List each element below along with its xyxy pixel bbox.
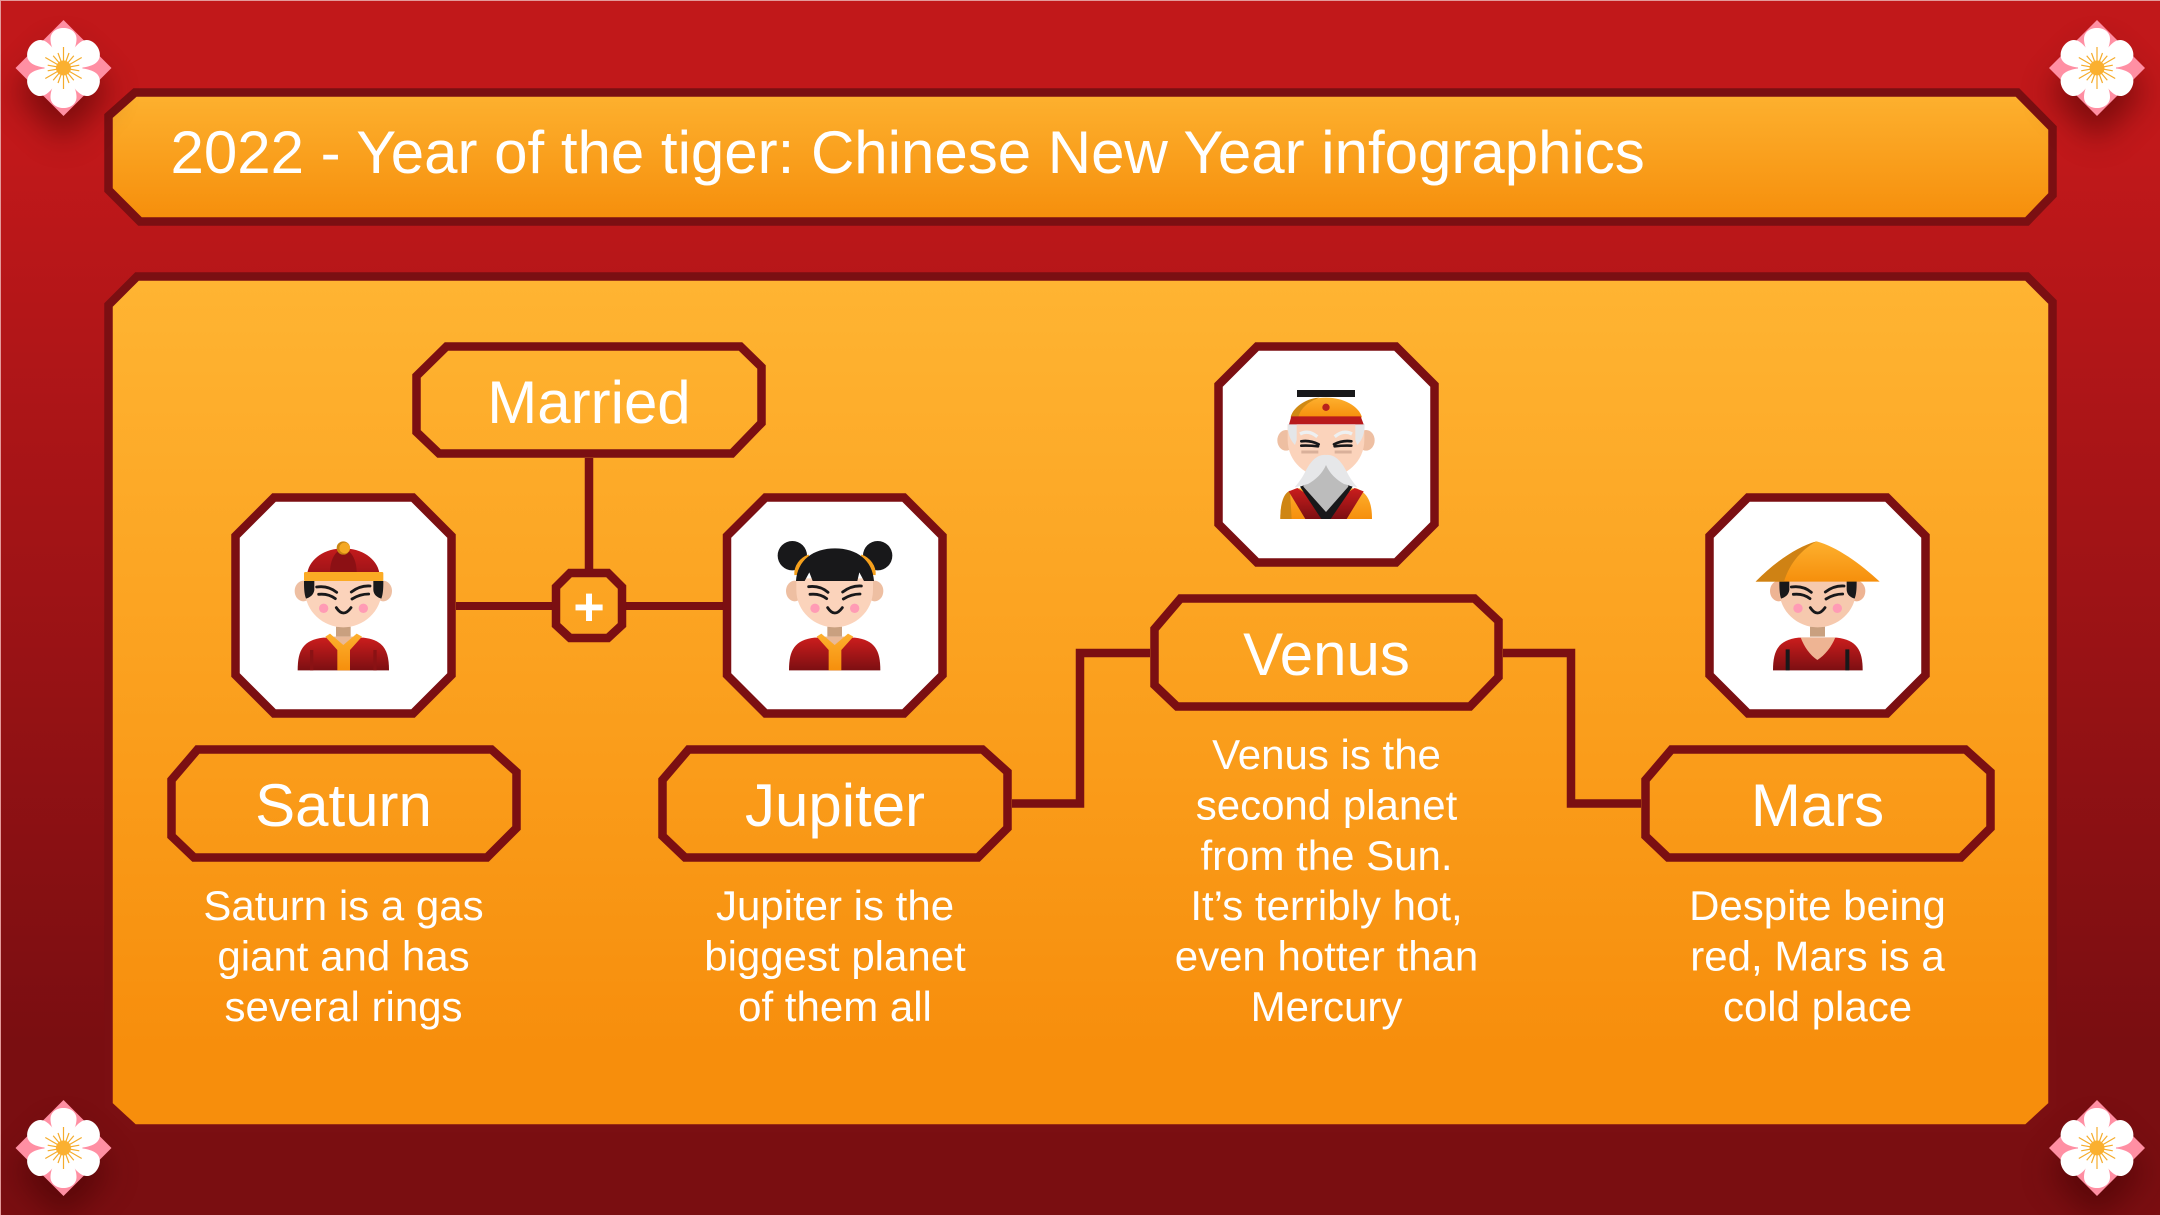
label: saturn xyxy=(172,750,516,858)
description: jupiter: biggest planet xyxy=(704,932,966,980)
icon: boy with red cap xyxy=(295,541,392,670)
description: venus: even hotter than xyxy=(1175,932,1478,980)
flower: bottom right xyxy=(2049,1100,2145,1215)
plus node xyxy=(556,573,622,638)
flower: top right xyxy=(2049,20,2145,140)
label: jupiter: Jupiter xyxy=(745,772,925,839)
plus node: + xyxy=(573,577,605,637)
icon: old man with beard xyxy=(1277,390,1375,519)
description: saturn: Saturn is a gas xyxy=(203,882,484,929)
avatar card: jupiter xyxy=(727,498,942,714)
description: venus: from the Sun. xyxy=(1200,832,1453,879)
connector: jupiter to venus xyxy=(1012,653,1150,804)
avatar card: mars xyxy=(1710,498,1926,714)
description: mars: red, Mars is a xyxy=(1690,932,1945,980)
description: venus: Mercury xyxy=(1251,983,1402,1030)
avatar card: saturn xyxy=(236,498,452,714)
label: mars: Mars xyxy=(1751,772,1884,839)
connector: venus to mars xyxy=(1503,653,1641,804)
description: venus: second planet xyxy=(1196,781,1458,828)
avatar card: venus xyxy=(1218,346,1434,562)
icon: girl with hair buns xyxy=(778,541,892,670)
description: jupiter: Jupiter is the xyxy=(716,882,954,929)
icon: man with straw hat xyxy=(1756,541,1880,670)
flower: bottom left xyxy=(15,1100,112,1215)
label: venus xyxy=(1154,598,1498,706)
label: jupiter xyxy=(662,750,1008,858)
description: saturn: giant and has xyxy=(217,932,470,980)
flower: top left xyxy=(15,20,112,140)
description: jupiter: of them all xyxy=(738,983,932,1030)
description: mars: cold place xyxy=(1723,983,1912,1030)
description: saturn: several rings xyxy=(224,983,463,1030)
connector: married to plus xyxy=(585,458,593,570)
main panel xyxy=(108,276,2052,1128)
label: venus: Venus xyxy=(1243,621,1410,688)
description: venus: Venus is the xyxy=(1212,731,1441,778)
title banner xyxy=(108,92,2052,222)
title: 2022 - Year of the tiger: Chinese New Year infographics xyxy=(170,119,1645,186)
description: mars: Despite being xyxy=(1689,882,1946,929)
connector: saturn to plus to jupiter xyxy=(456,602,723,610)
label: saturn: Saturn xyxy=(255,772,432,839)
married label xyxy=(416,346,762,454)
married label: Married xyxy=(487,369,691,436)
label: mars xyxy=(1646,750,1990,858)
description: venus: It’s terribly hot, xyxy=(1190,882,1463,929)
